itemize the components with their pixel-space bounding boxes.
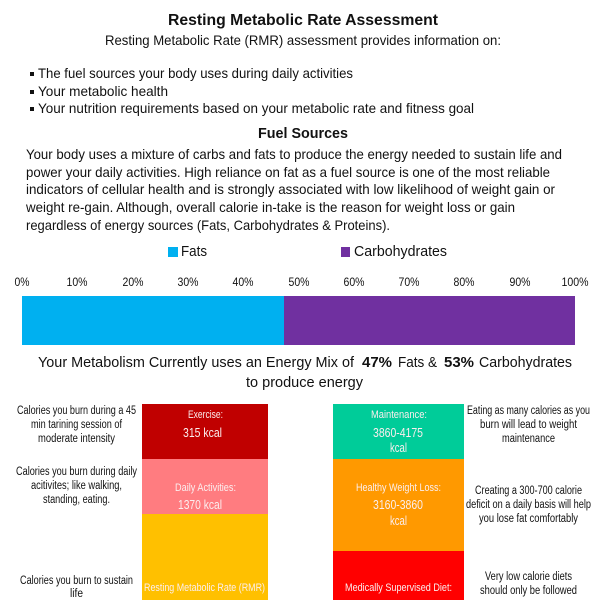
note: daily activities bbox=[16, 466, 137, 506]
note: resting metabolic rate: Calories you burn to sustain bbox=[20, 575, 133, 587]
block: daily activities bbox=[142, 459, 268, 514]
percent axis labels: 60% bbox=[344, 277, 364, 289]
note: maintenance bbox=[467, 405, 590, 445]
energy mix summary: Your Metabolism Currently uses an Energy Mix of bbox=[38, 355, 355, 371]
block: medically supervised diet bbox=[333, 551, 464, 600]
block: daily activities: 1370 kcal bbox=[178, 497, 222, 512]
note: medically supervised diet: Very low calorie diets bbox=[485, 571, 572, 583]
panel: calories burned stack bbox=[16, 404, 268, 600]
fuel sources paragraph: power your daily activities. High reliance on fat as a fuel source is one of the most reliable bbox=[26, 164, 550, 180]
block: healthy weight loss: kcal bbox=[390, 513, 407, 528]
note: medically supervised diet bbox=[480, 571, 577, 597]
bullet list: The fuel sources your body uses during daily activities bbox=[38, 65, 353, 81]
percent axis labels: 0% bbox=[14, 277, 30, 289]
block: daily activities: Daily Activities: bbox=[175, 482, 236, 494]
chart legend bbox=[168, 244, 447, 260]
percent axis labels: 40% bbox=[232, 277, 254, 289]
percent axis labels: 70% bbox=[398, 277, 420, 289]
note: healthy weight loss: you lose fat comfortably bbox=[479, 513, 578, 525]
block: maintenance: Maintenance: bbox=[371, 409, 427, 421]
bullet list: Your metabolic health bbox=[38, 83, 168, 99]
title: Resting Metabolic Rate Assessment bbox=[168, 12, 439, 29]
note: exercise: Calories you burn during a 45 bbox=[17, 405, 136, 417]
note: maintenance: burn will lead to weight bbox=[480, 419, 578, 431]
fuel sources paragraph: indicators of cellular health and is strongly associated with low likelihood of weight gain or bbox=[26, 181, 555, 197]
block: maintenance: kcal bbox=[390, 440, 407, 455]
note: medically supervised diet: should only be followed bbox=[480, 585, 577, 597]
note: healthy weight loss bbox=[466, 485, 591, 525]
percent axis labels bbox=[14, 277, 588, 289]
energy mix summary bbox=[38, 355, 572, 391]
heading: fuel sources: Fuel Sources bbox=[258, 126, 348, 142]
block: exercise: Exercise: bbox=[188, 409, 223, 421]
note: daily activities: standing, eating. bbox=[43, 494, 110, 506]
block: resting metabolic rate: Resting Metabolic Rate (RMR) bbox=[144, 582, 265, 594]
note: maintenance: maintenance bbox=[502, 433, 555, 445]
block: medically supervised diet: Medically Supervised Diet: bbox=[345, 582, 452, 594]
energy mix summary: Fats & bbox=[398, 355, 437, 371]
note: resting metabolic rate bbox=[20, 575, 133, 600]
energy mix summary: 47% bbox=[362, 355, 392, 371]
percent axis labels: 20% bbox=[122, 277, 144, 289]
bullet list bbox=[30, 65, 474, 116]
fuel sources paragraph: Your body uses a mixture of carbs and fats to produce the energy needed to sustain life and bbox=[26, 146, 562, 162]
energy mix summary: to produce energy bbox=[246, 375, 364, 391]
block: resting metabolic rate bbox=[142, 514, 268, 600]
block: exercise bbox=[142, 404, 268, 459]
note: daily activities: Calories you burn during daily bbox=[16, 466, 137, 478]
subtitle: Resting Metabolic Rate (RMR) assessment provides information on: bbox=[105, 32, 501, 48]
note: exercise: moderate intensity bbox=[38, 433, 115, 445]
percent axis labels: 90% bbox=[510, 277, 530, 289]
note: resting metabolic rate: life bbox=[70, 588, 83, 600]
block: maintenance: 3860-4175 bbox=[373, 425, 423, 440]
energy mix summary: Carbohydrates bbox=[479, 355, 572, 371]
block: healthy weight loss bbox=[333, 459, 464, 551]
percent axis labels: 80% bbox=[454, 277, 474, 289]
stacked energy mix bar bbox=[22, 296, 575, 345]
percent axis labels: 50% bbox=[288, 277, 310, 289]
percent axis labels: 100% bbox=[562, 277, 588, 289]
block: maintenance bbox=[333, 404, 464, 459]
percent axis labels: 30% bbox=[178, 277, 198, 289]
chart legend: Fats bbox=[181, 244, 207, 260]
panel: calorie targets stack bbox=[333, 404, 591, 600]
fuel sources paragraph: regardless of energy sources (Fats, Carbohydrates & Proteins). bbox=[26, 217, 390, 233]
block: exercise: 315 kcal bbox=[183, 425, 222, 440]
fuel sources paragraph bbox=[25, 146, 562, 233]
block: healthy weight loss: Healthy Weight Loss: bbox=[356, 482, 441, 494]
note: exercise bbox=[17, 405, 136, 445]
bullet list: Your nutrition requirements based on your metabolic rate and fitness goal bbox=[38, 100, 474, 116]
note: daily activities: acitivites; like walking, bbox=[31, 480, 122, 492]
chart legend: Carbohydrates bbox=[354, 244, 447, 260]
block: healthy weight loss: 3160-3860 bbox=[373, 497, 423, 512]
fuel sources paragraph: weight re-gain. Although, overall calorie in-take is the reason for weight loss or gain bbox=[25, 199, 515, 215]
note: exercise: min tarining session of bbox=[31, 419, 123, 431]
percent axis labels: 10% bbox=[66, 277, 88, 289]
energy mix summary: 53% bbox=[444, 355, 474, 371]
